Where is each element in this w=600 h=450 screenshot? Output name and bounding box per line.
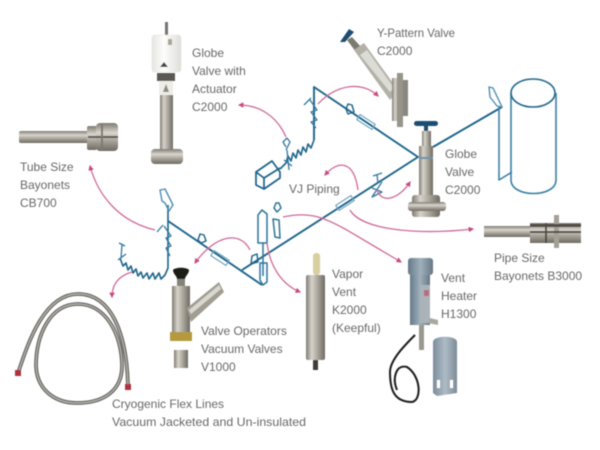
vent symbol left	[160, 189, 173, 211]
tall vessel symbols	[258, 203, 281, 285]
photo: globe valve	[408, 121, 446, 217]
storage tank	[511, 93, 556, 194]
photo: cryogenic flex line	[15, 294, 131, 403]
photo: valve operator	[170, 268, 224, 368]
arrow: vent heater	[283, 215, 401, 262]
arrow: globe valve with actuator	[239, 105, 286, 137]
label: Valve Operators Vacuum Valves V1000: Valve Operators	[201, 324, 287, 338]
label: Tube Size Bayonets CB700: Tube Size	[20, 160, 74, 174]
photo: tube size bayonet	[19, 123, 118, 151]
label: Globe Valve with Actuator C2000: Actuator	[192, 82, 237, 96]
arrow: globe valve	[377, 182, 410, 198]
photo: vapor vent	[306, 253, 325, 370]
tank top	[511, 79, 555, 107]
arrow: tube size bayonets	[90, 166, 155, 230]
arrow: VJ piping	[325, 165, 358, 190]
photo: y-pattern valve	[340, 29, 408, 127]
label: Vapor Vent K2000 (Keepful): Vent	[332, 285, 357, 299]
label: Vent Heater H1300: H1300	[441, 307, 477, 321]
label: Globe Valve with Actuator C2000: Valve with	[192, 64, 246, 78]
small tab symbols	[198, 104, 354, 264]
label: Globe Valve C2000: Globe	[445, 147, 477, 161]
label: Vapor Vent K2000 (Keepful): (Keepful)	[332, 321, 381, 335]
label: Vapor Vent K2000 (Keepful): Vapor	[332, 267, 363, 281]
label: Valve Operators Vacuum Valves V1000: Vacuum Valves	[201, 342, 283, 356]
label: VJ Piping: VJ Piping	[289, 182, 340, 196]
label: Vacuum Jacketed and Un-insulated: Vacuum Jacketed and Un-insulated	[112, 415, 306, 429]
label: Tube Size Bayonets CB700: Bayonets	[20, 178, 70, 192]
vent symbol right	[489, 87, 502, 107]
piping schematic	[118, 79, 556, 285]
label: Vapor Vent K2000 (Keepful): K2000	[332, 303, 367, 317]
label: Valve Operators Vacuum Valves V1000: V1000	[201, 360, 236, 374]
arrow: valve operators	[195, 238, 250, 263]
box symbol	[256, 161, 280, 189]
main pipe run	[168, 87, 502, 285]
label: Y-Pattern Valve C2000: Y-Pattern Valve	[377, 26, 455, 40]
label: Pipe Size Bayonets B3000: Bayonets B3000	[494, 269, 582, 283]
label: Y-Pattern Valve C2000: C2000	[377, 44, 413, 58]
pink callout arrows	[90, 86, 473, 297]
valve symbols	[118, 98, 382, 260]
label: Vent Heater H1300: Vent	[441, 271, 466, 285]
upper zigzag hose	[280, 140, 314, 169]
left riser and zigzag hose	[120, 205, 168, 279]
label: Pipe Size Bayonets B3000: Pipe Size	[494, 251, 545, 265]
label: Cryogenic Flex Lines: Cryogenic Flex Lines	[112, 397, 224, 411]
label: Vent Heater H1300: Heater	[441, 289, 477, 303]
arrow: flex lines	[112, 272, 132, 297]
vent line to tank	[499, 107, 512, 180]
expansion joints	[211, 115, 375, 265]
arrow: vapor vent	[267, 243, 300, 292]
arrow: y-pattern valve	[318, 86, 378, 104]
label: Tube Size Bayonets CB700: CB700	[20, 196, 57, 210]
label: Globe Valve C2000: Valve	[445, 165, 474, 179]
label: Globe Valve with Actuator C2000: C2000	[192, 100, 228, 114]
photo: vent heater	[390, 258, 457, 402]
photo: pipe size bayonet	[484, 215, 581, 248]
label: Globe Valve C2000: C2000	[445, 183, 481, 197]
arrow: pipe size bayonets	[350, 210, 473, 232]
label: Globe Valve with Actuator C2000: Globe	[192, 46, 224, 60]
photo: globe valve with actuator	[151, 22, 183, 164]
